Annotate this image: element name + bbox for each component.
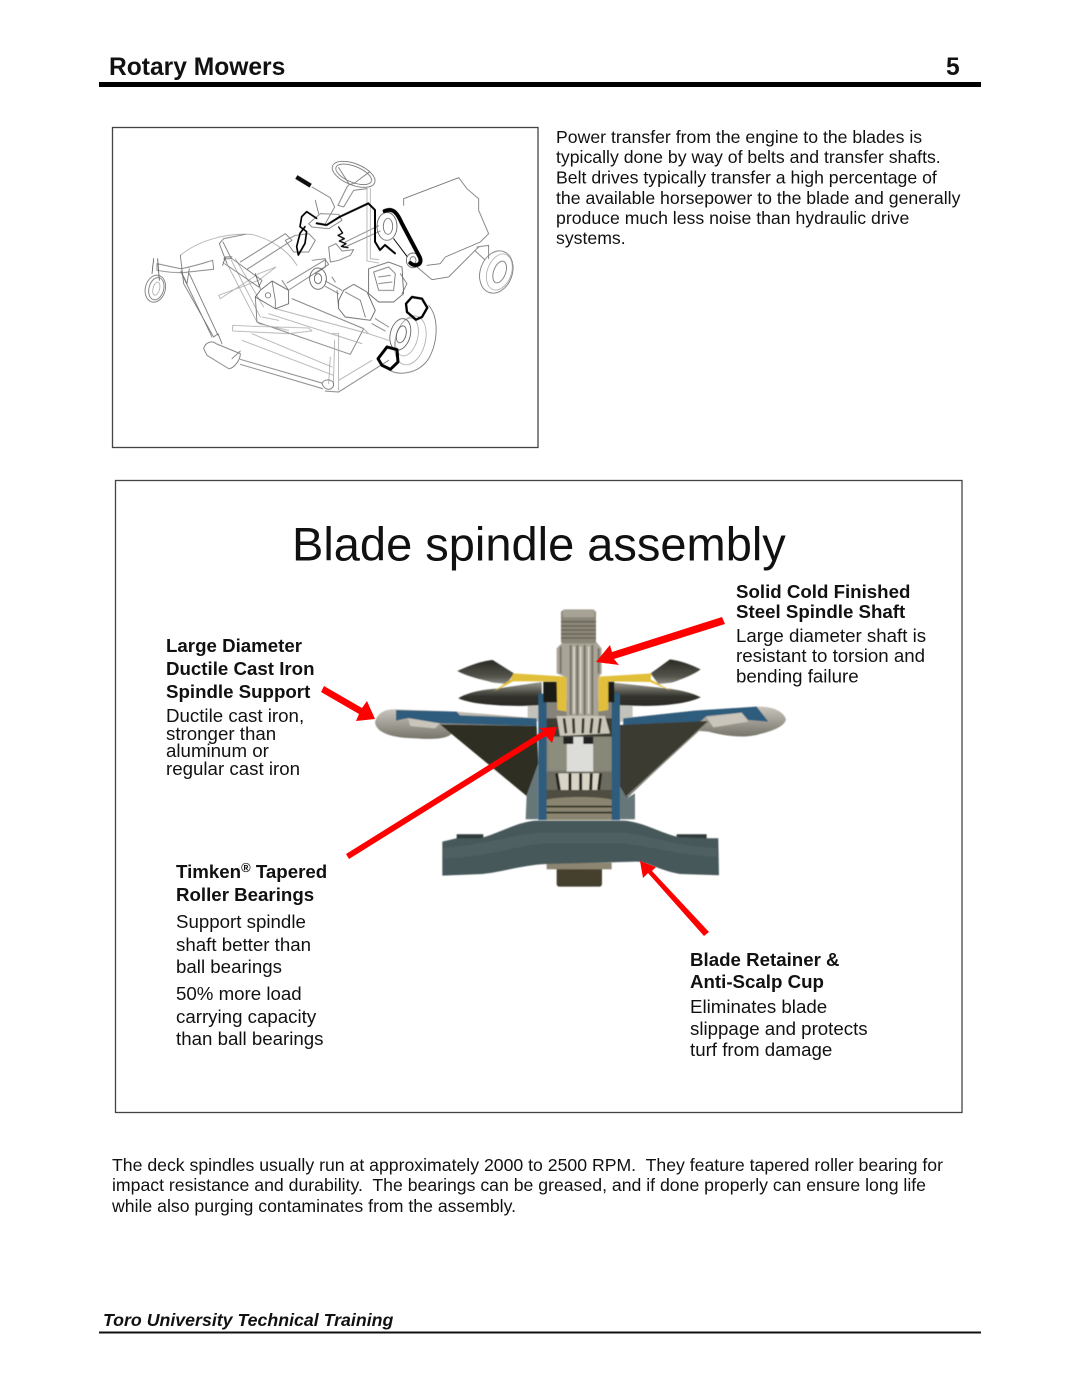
page footer: Toro University Technical Training [103, 1310, 393, 1330]
callout: roller bearings: 50% more load [176, 983, 302, 1004]
callout: spindle support: regular cast iron [166, 758, 300, 779]
steering wheel [329, 156, 379, 207]
callout: blade retainer: Eliminates blade [690, 996, 827, 1017]
text block: power transfer: systems. [556, 228, 626, 248]
text block: power transfer: Power transfer from the engine to the blades is [556, 127, 922, 147]
drive belt and highlighted lines [297, 203, 421, 265]
callout: blade retainer: Anti-Scalp Cup [690, 971, 824, 992]
callout: spindle shaft [736, 581, 926, 686]
drive wheel [387, 305, 436, 373]
callout: blade retainer: Blade Retainer & [690, 949, 840, 970]
yellow hub [493, 673, 567, 712]
upper pulley wings [457, 660, 514, 684]
lift arm and frame [223, 187, 380, 309]
callout: roller bearings: ball bearings [176, 956, 282, 977]
transaxle and axle [310, 262, 407, 331]
front caster wheel [142, 259, 169, 304]
spindle shaft [557, 609, 602, 716]
callout: spindle support: aluminum or [166, 740, 269, 761]
blue housing walls [538, 693, 547, 820]
callout: spindle support: Spindle Support [166, 681, 310, 702]
callout: roller bearings: than ball bearings [176, 1028, 324, 1049]
tapered roller bearings [545, 716, 613, 820]
arrow: spindle shaft [596, 617, 725, 665]
callout: spindle support: Large Diameter [166, 635, 302, 656]
mower deck [157, 234, 389, 392]
text block: power transfer: produce much less noise than hydraulic drive [556, 208, 909, 228]
callout: spindle shaft: Steel Spindle Shaft [736, 601, 905, 622]
text block: deck spindles [111, 1155, 943, 1216]
support plate left [375, 709, 537, 739]
panel: mower drive illustration [112, 128, 538, 448]
callout: spindle support: stronger than [166, 723, 276, 744]
text block: power transfer: the available horsepower to the blade and generally [556, 188, 961, 208]
callout: blade retainer: turf from damage [690, 1039, 832, 1060]
text block: power transfer: typically done by way of belts and transfer shafts. [556, 147, 941, 167]
callout: roller bearings: Support spindle [176, 911, 306, 932]
control lever [296, 177, 311, 186]
callout: roller bearings: shaft better than [176, 934, 311, 955]
gussets [440, 724, 538, 796]
arrow: blade retainer [640, 861, 709, 936]
callout: spindle shaft: Solid Cold Finished [736, 581, 910, 602]
panel: blade spindle assembly [116, 480, 962, 1112]
callout: spindle shaft: Large diameter shaft is [736, 625, 926, 646]
text block: power transfer: Belt drives typically transfer a high percentage of [556, 168, 937, 188]
housing sleeve [526, 763, 538, 819]
panel title: Blade spindle assembly [292, 518, 786, 570]
callout: roller bearings [176, 860, 327, 1049]
callout: spindle shaft: bending failure [736, 666, 859, 686]
rear wheel [474, 245, 519, 298]
callout: spindle support: Ductile cast iron, [166, 705, 304, 726]
text block: deck spindles: while also purging contaminates from the assembly. [111, 1196, 516, 1216]
tensioner spring [338, 227, 348, 248]
callout: roller bearings: Roller Bearings [176, 884, 314, 905]
support plate right [623, 707, 786, 736]
housing interior [545, 700, 613, 820]
callout: spindle support [166, 635, 314, 779]
spindle cutaway picture [375, 609, 786, 887]
lower pulley flange [458, 682, 542, 706]
highlighted wheel drive loops [378, 297, 427, 369]
pulleys [377, 212, 420, 268]
blade retainer cup [442, 821, 719, 887]
page header [99, 54, 981, 87]
callout: spindle shaft: resistant to torsion and [736, 645, 925, 666]
callout: roller bearings: Timken [176, 861, 241, 882]
callout: blade retainer: slippage and protects [690, 1018, 868, 1039]
callout: spindle support: Ductile Cast Iron [166, 658, 314, 679]
callout: roller bearings: ® [241, 860, 251, 875]
arrow: roller bearings [346, 727, 557, 859]
collars under pulley [528, 702, 539, 722]
callout: roller bearings: carrying capacity [176, 1006, 317, 1027]
text block: power transfer [556, 127, 961, 248]
arrow: spindle support [321, 686, 375, 721]
text block: deck spindles: The deck spindles usually run at approximately 2000 to 2500 RPM. They feature tapered roller bearing for [112, 1155, 943, 1175]
text block: deck spindles: impact resistance and durability. The bearings can be greased, and if done properly can ensure long life [112, 1175, 926, 1195]
callout: blade retainer [690, 949, 868, 1060]
callout: roller bearings: Tapered [251, 861, 327, 882]
engine cover [404, 178, 489, 280]
page header: Rotary Mowers [109, 54, 285, 81]
page header: 5 [946, 54, 960, 81]
